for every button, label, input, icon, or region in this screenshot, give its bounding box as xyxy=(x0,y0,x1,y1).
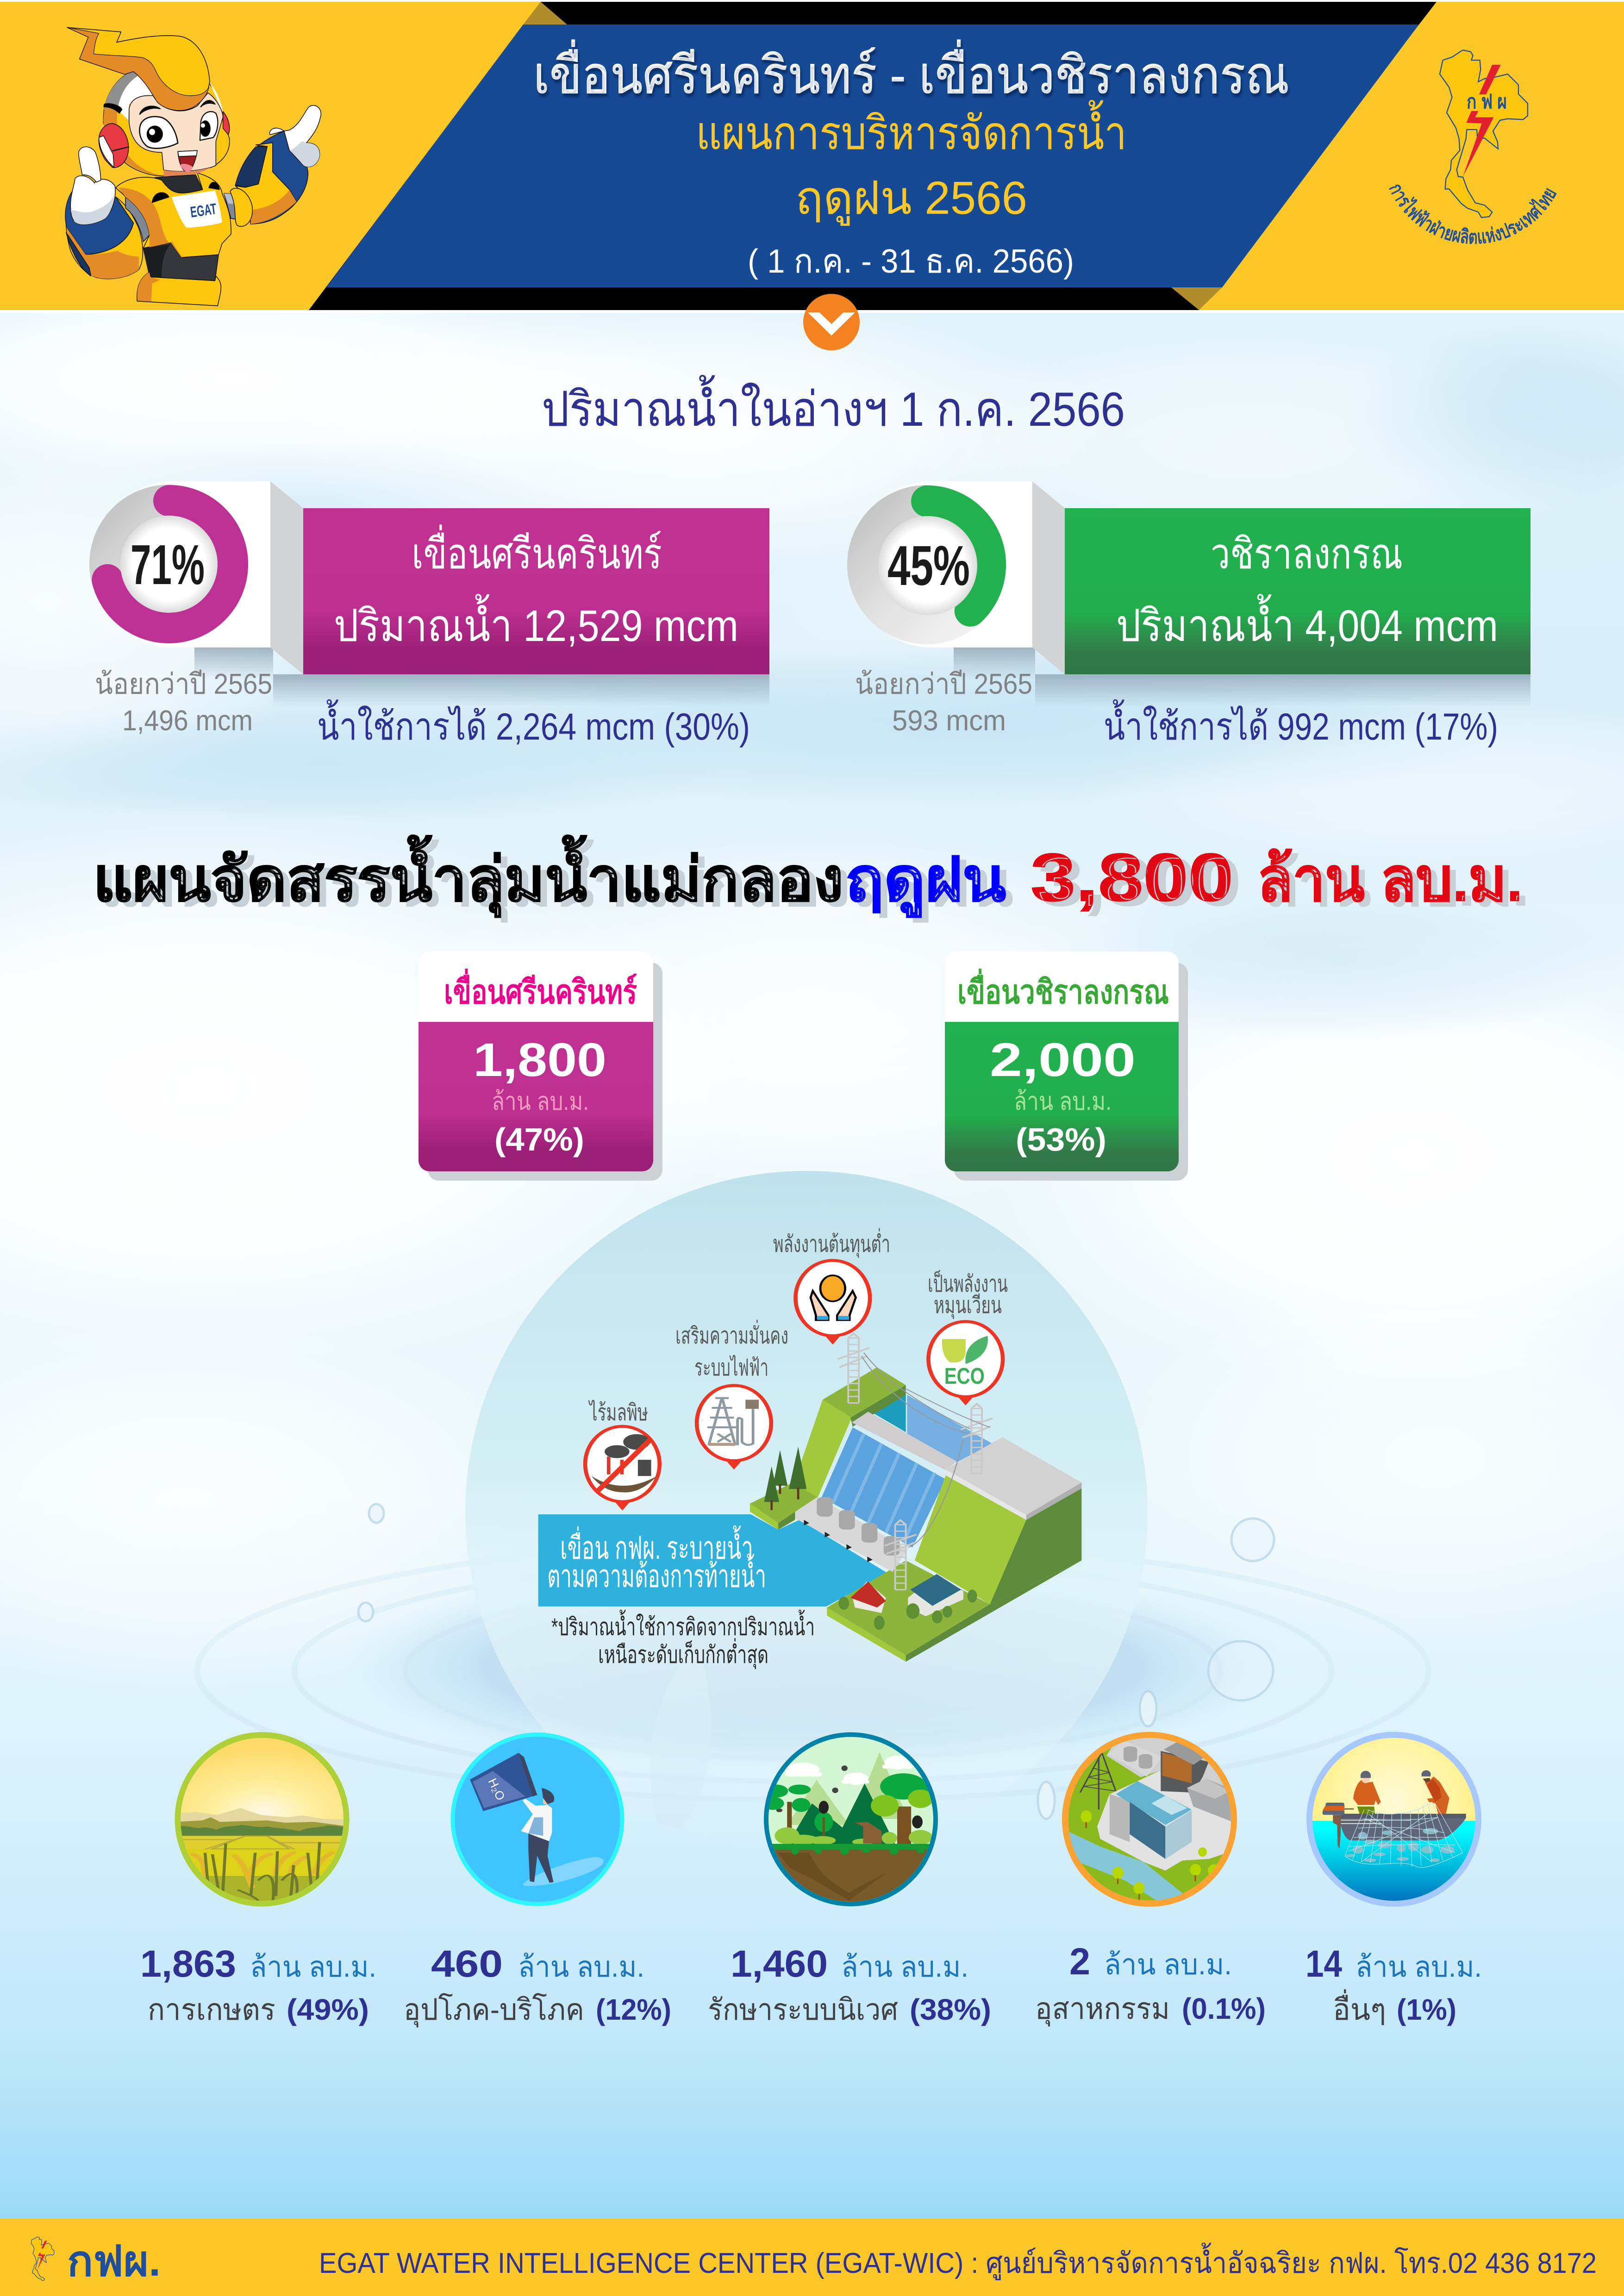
difference value: 593 mcm xyxy=(892,705,1006,737)
usage: agriculture xyxy=(140,1943,376,2026)
card: Srinagarind allocation xyxy=(418,952,662,1181)
icon: industry xyxy=(1065,1735,1237,1904)
usable water: น้ำใช้การได้ 992 mcm (17%) xyxy=(1104,699,1498,748)
pin: no pollution xyxy=(585,1426,660,1511)
gauge: 45 percent xyxy=(847,485,1006,644)
label: grid security: เสริมความมั่นคง xyxy=(675,1320,788,1349)
usable water: น้ำใช้การได้ 2,264 mcm (30%) xyxy=(317,699,750,748)
panel title: เขื่อนศรีนครินทร์ xyxy=(412,524,662,578)
water ripples and splash xyxy=(197,1369,1429,1828)
label: renewable line 1: เป็นพลังงาน xyxy=(928,1270,1008,1297)
usage: ecosystem: ล้าน ลบ.ม. xyxy=(841,1951,968,1983)
label: no pollution: ไร้มลพิษ xyxy=(588,1400,648,1425)
card: Vajiralongkorn allocation: เขื่อนวชิราลงกรณ xyxy=(957,968,1169,1011)
card: Vajiralongkorn allocation: (53%) xyxy=(1016,1121,1106,1157)
label: power system: ระบบไฟฟ้า xyxy=(694,1355,768,1381)
footnote line 1: *ปริมาณน้ำใช้การคิดจากปริมาณน้ำ xyxy=(551,1610,815,1641)
usage: agriculture: ล้าน ลบ.ม. xyxy=(250,1951,376,1983)
gauge: 45 percent: 45% xyxy=(887,534,970,597)
logo organisation name on arc: การไฟฟ้าฝ่ายผลิตแห่งประเทศไทย xyxy=(1385,180,1561,248)
label: renewable line 2: หมุนเวียน xyxy=(934,1292,1002,1319)
card: Vajiralongkorn allocation: 2,000 xyxy=(990,1033,1136,1086)
footer band xyxy=(0,2218,1624,2296)
comparison with 2565: น้อยกว่าปี 2565 xyxy=(95,668,272,700)
card: Srinagarind allocation: 1,800 xyxy=(473,1033,606,1086)
pin: renewable ECO: ECO xyxy=(944,1363,985,1389)
mascot EGAT badge text: EGAT xyxy=(189,200,218,221)
logo map initials: ก ฟ ผ xyxy=(1467,91,1507,112)
gauge: 71 percent xyxy=(89,485,249,644)
usage: agriculture: 1,863 xyxy=(140,1943,236,1985)
panel: Srinagarind reservoir xyxy=(89,481,769,748)
panel volume: ปริมาณน้ำ 12,529 mcm xyxy=(334,594,738,651)
heading: Mae Klong allocation plan: ฤดูฝน xyxy=(845,846,1006,918)
usage: ecosystem: 1,460 xyxy=(731,1943,828,1985)
comparison with 2565: น้อยกว่าปี 2565 xyxy=(855,668,1032,700)
usage: agriculture: การเกษตร xyxy=(148,1993,275,2026)
footnote line 2: เหนือระดับเก็บกักต่ำสุด xyxy=(598,1638,768,1669)
usage: industry: 2 xyxy=(1069,1941,1090,1983)
transmission towers xyxy=(837,1333,993,1590)
usage: others: อื่นๆ xyxy=(1333,1989,1386,2026)
usage: industry: ล้าน ลบ.ม. xyxy=(1104,1949,1232,1981)
footer logo wordmark: กฟผ. xyxy=(67,2238,161,2285)
logo: EGAT Thailand map xyxy=(1385,50,1561,248)
usage: ecosystem xyxy=(708,1943,991,2026)
usage: others: (1%) xyxy=(1397,1993,1456,2026)
panel: dam illustration circle xyxy=(465,1171,1148,1853)
icon: agriculture xyxy=(173,1734,350,1905)
usage: ecosystem: (38%) xyxy=(910,1993,991,2026)
label: low cost energy: พลังงานต้นทุนต่ำ xyxy=(773,1228,890,1258)
usage: others: 14 xyxy=(1305,1943,1342,1985)
pin: low cost energy xyxy=(795,1260,870,1344)
header date range: ( 1 ก.ค. - 31 ธ.ค. 2566) xyxy=(748,243,1074,280)
heading: Mae Klong allocation plan: 3,800 xyxy=(1031,840,1233,915)
orange chevron button xyxy=(803,294,860,350)
header subtitle: season: ฤดูฝน 2566 xyxy=(795,172,1027,226)
usage: consumption: 460 xyxy=(431,1943,503,1985)
houses xyxy=(838,1574,977,1630)
release water box xyxy=(538,1514,888,1606)
card: Vajiralongkorn allocation: ล้าน ลบ.ม. xyxy=(1014,1088,1112,1115)
usage: consumption: ล้าน ลบ.ม. xyxy=(518,1951,644,1983)
box text line 2: ตามความต้องการท้ายน้ำ xyxy=(547,1554,766,1594)
header subtitle: water plan: แผนการบริหารจัดการน้ำ xyxy=(696,100,1127,159)
dam illustration xyxy=(538,1260,1081,1662)
gauge: 71 percent: 71% xyxy=(131,533,205,596)
usage: others xyxy=(1305,1943,1482,2026)
usage: others: ล้าน ลบ.ม. xyxy=(1355,1951,1482,1983)
usage: industry: อุสาหกรรม xyxy=(1035,1992,1170,2027)
H2O sign text: H₂O xyxy=(486,1776,508,1803)
header banner xyxy=(0,2,1624,350)
usage: agriculture: (49%) xyxy=(287,1993,369,2026)
panel title: วชิราลงกรณ xyxy=(1211,530,1403,578)
panel: Vajiralongkorn reservoir xyxy=(847,481,1530,748)
heading: Mae Klong allocation plan xyxy=(93,834,1523,918)
heading: Mae Klong allocation plan: แผนจัดสรรน้ำลุ่มน้ำแม่กลอง xyxy=(93,834,843,918)
pin: grid security xyxy=(697,1386,771,1469)
card: Srinagarind allocation: ล้าน ลบ.ม. xyxy=(492,1088,589,1115)
usage: industry: (0.1%) xyxy=(1182,1992,1266,2025)
usage: consumption: อุปโภค-บริโภค xyxy=(404,1993,584,2028)
heading: water volume in reservoir: ปริมาณน้ำในอ่างฯ 1 ก.ค. 2566 xyxy=(542,375,1125,436)
card: Vajiralongkorn allocation xyxy=(945,952,1188,1181)
usage: ecosystem: รักษาระบบนิเวศ xyxy=(708,1993,898,2026)
header title: dam names: เขื่อนศรีนครินทร์ - เขื่อนวชิราลงกรณ xyxy=(533,39,1289,104)
box text line 1: เขื่อน กฟผ. ระบายน้ำ xyxy=(560,1525,753,1566)
card: Srinagarind allocation: เขื่อนศรีนครินทร์ xyxy=(444,968,637,1011)
icon: consumption xyxy=(453,1735,622,1904)
icon: fishing xyxy=(1310,1735,1478,1904)
footer logo map xyxy=(31,2237,54,2281)
heading: Mae Klong allocation plan: ล้าน ลบ.ม. xyxy=(1257,846,1523,914)
icon: ecosystem xyxy=(762,1735,939,1904)
difference value: 1,496 mcm xyxy=(122,705,253,737)
icon: EGAT mascot xyxy=(65,27,321,306)
usage: consumption: (12%) xyxy=(596,1993,671,2026)
card: Srinagarind allocation: (47%) xyxy=(494,1121,584,1157)
usage: industry xyxy=(1035,1941,1266,2027)
panel volume: ปริมาณน้ำ 4,004 mcm xyxy=(1116,594,1498,651)
usage: consumption xyxy=(404,1943,671,2028)
pin: renewable ECO xyxy=(928,1321,1003,1405)
